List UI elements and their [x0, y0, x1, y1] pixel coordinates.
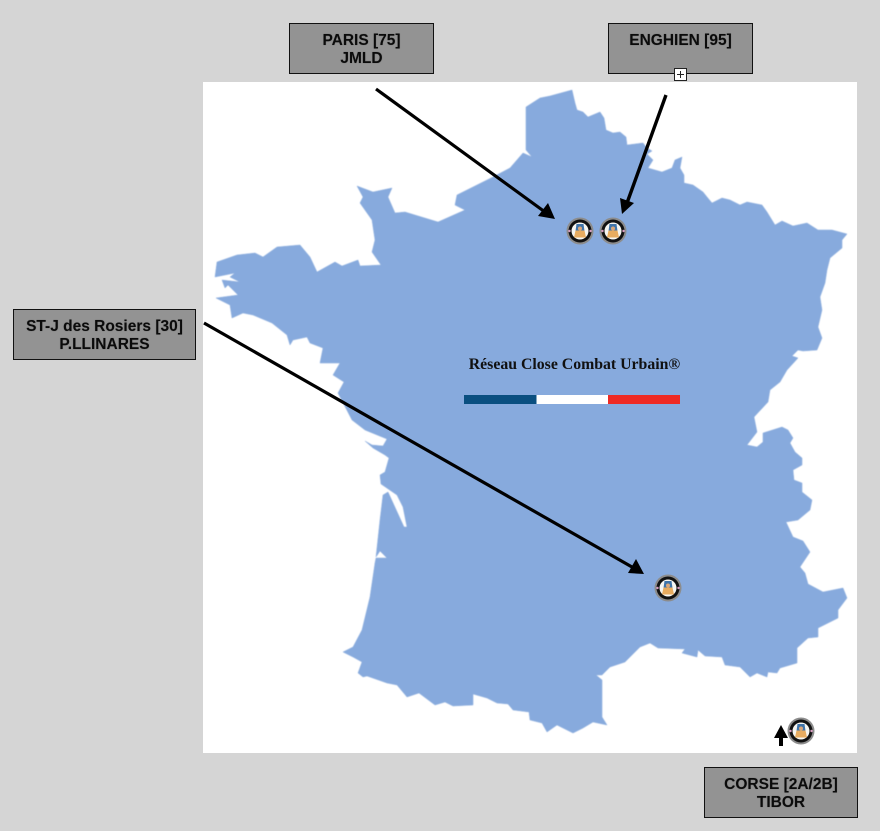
label: Enghien: [608, 23, 753, 74]
map of France: [215, 90, 847, 733]
arrow: Corse: [774, 725, 788, 746]
title: Réseau Close Combat Urbain: Réseau Close Combat Urbain®: [469, 356, 680, 373]
icon: expand plus: [674, 68, 687, 81]
label: Corse: [704, 767, 858, 818]
arrow: St-J des Rosiers: [204, 323, 644, 574]
badge: St-J des Rosiers: [654, 574, 682, 602]
label: Corse: CORSE [2A/2B]: [724, 776, 838, 793]
label: Enghien: ENGHIEN [95]: [629, 32, 732, 49]
badge: Paris: [566, 218, 594, 244]
label: Corse: TIBOR: [757, 794, 805, 811]
label: St-J des Rosiers: P.LLINARES: [59, 336, 150, 353]
arrow: Enghien: [620, 95, 666, 214]
label: Paris: PARIS [75]: [322, 32, 401, 49]
white map panel: [203, 82, 857, 753]
label: Paris: JMLD: [340, 50, 383, 67]
label: St-J des Rosiers: [13, 309, 196, 360]
badge: Corse: [788, 718, 814, 744]
label: Paris: [289, 23, 434, 74]
badge: Enghien: [600, 218, 626, 244]
tricolour flag bar: [464, 395, 680, 404]
arrow: Paris: [376, 89, 555, 219]
label: St-J des Rosiers: ST-J des Rosiers [30]: [26, 318, 183, 335]
